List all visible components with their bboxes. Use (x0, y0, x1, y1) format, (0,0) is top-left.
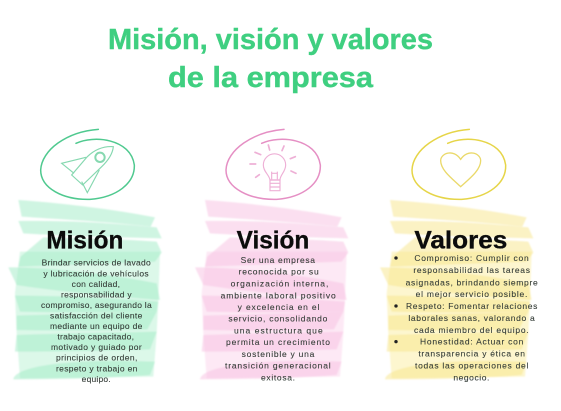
text: misión (41, 258, 152, 384)
text: valores: cada miembro del equipo. (414, 325, 529, 335)
text: misión: equipo. (82, 374, 111, 384)
text: valores: el mejor servicio posible. (416, 289, 527, 299)
text: misión: mediante un equipo de (50, 321, 143, 331)
text: valores: Respeto: Fomentar relaciones (406, 301, 537, 311)
text: valores: laborales sanas, valorando a (408, 313, 535, 323)
text: visión: una estructura que (234, 325, 323, 335)
panel: valores (380, 129, 538, 383)
text: visión: organización interna, (231, 278, 328, 288)
text: visión: reconocida por su (239, 267, 319, 277)
text: visión: exitosa. (261, 372, 295, 382)
text: visión: y excelencia en el (238, 302, 319, 312)
title: de la empresa (168, 62, 374, 94)
text: visión: permita un crecimiento (226, 337, 330, 347)
text: misión: responsabilidad y (61, 289, 132, 299)
icon: light bulb in circle (226, 129, 320, 199)
panel: visión (195, 129, 348, 382)
title: Misión, visión y valores (108, 24, 433, 56)
text: misión: principios de orden, (56, 353, 137, 363)
text: valores: transparencia y ética en (418, 349, 525, 359)
text: misión: trabajo capacitado, (57, 332, 134, 342)
text: valores: negocio. (453, 373, 489, 383)
text: misión: compromiso, asegurando la (41, 300, 152, 310)
text: visión: servicio, consolidando (228, 314, 328, 324)
text: misión: satisfacción del cliente (50, 310, 143, 320)
brush strokes: misión (8, 200, 162, 379)
brush strokes: valores (380, 200, 533, 379)
panel: misión (8, 129, 162, 384)
title (108, 24, 433, 94)
text: visión: transición generacional (225, 361, 331, 371)
text: visión: Ser una empresa (241, 255, 315, 265)
brush strokes: visión (195, 200, 348, 379)
text: misión: con calidad, (72, 279, 120, 289)
text: visión (221, 255, 336, 382)
heading: misión: Misión (46, 226, 123, 254)
text: valores (394, 253, 538, 383)
icon: heart in circle (412, 129, 506, 199)
text: valores: asignadas, brindando siempre (406, 277, 538, 287)
heading: valores: Valores (414, 226, 507, 254)
icon: rocket in circle (41, 129, 134, 199)
text: misión: Brindar servicios de lavado (42, 258, 151, 268)
text: valores: responsabilidad las tareas (413, 265, 530, 275)
text: misión: motivado y guiado por (51, 342, 142, 352)
heading: visión: Visión (237, 226, 309, 254)
text: misión: y lubricación de vehículos (43, 268, 149, 278)
text: misión: respeto y trabajo en (56, 363, 138, 373)
text: valores: Honestidad: Actuar con (420, 337, 524, 347)
text: valores: todas las operaciones del (415, 361, 528, 371)
text: visión: sostenible y una (242, 349, 315, 359)
text: valores: Compromiso: Cumplir con (414, 253, 529, 263)
text: visión: ambiente laboral positivo (221, 290, 336, 300)
